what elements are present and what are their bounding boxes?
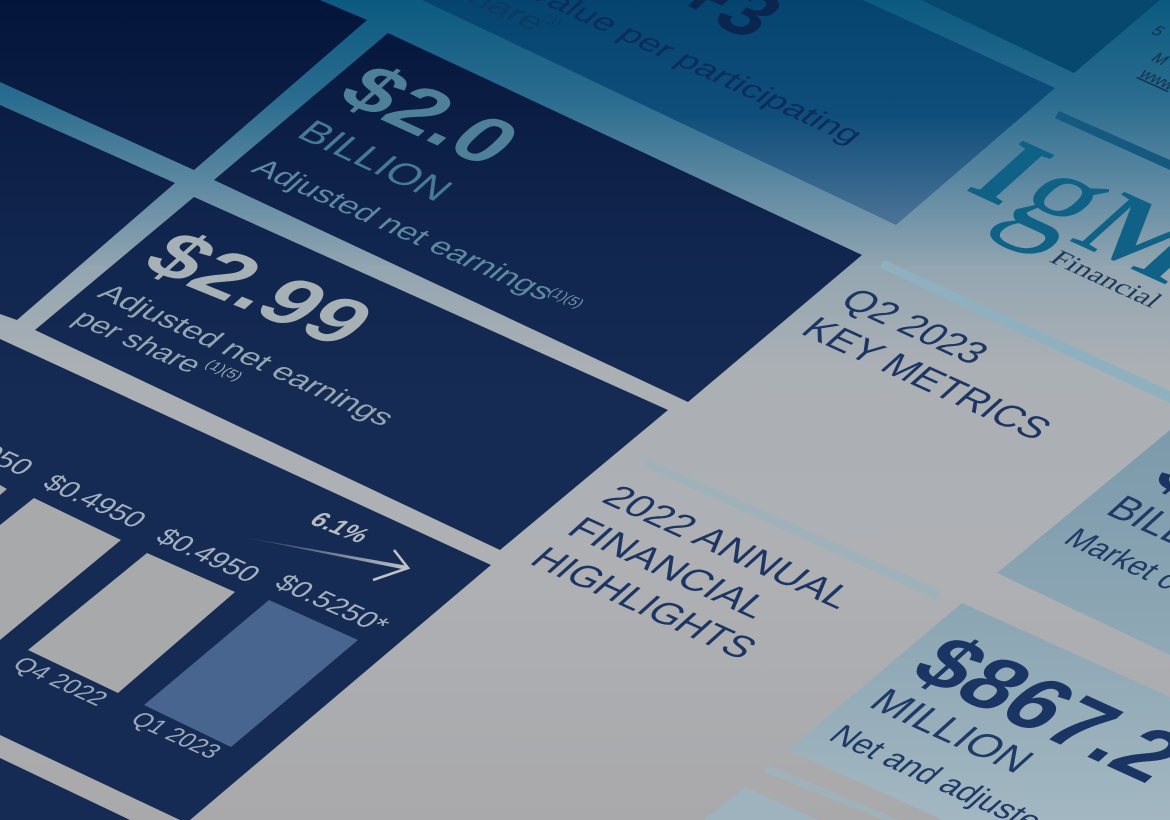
panel: top left blank: [0, 0, 367, 170]
bar: Q3 2022: [0, 498, 121, 640]
value label Q4: $0.4950: [36, 469, 153, 533]
value label Q1 2023: $0.5250*: [268, 569, 397, 638]
panel: adjusted net earnings per share: [35, 197, 668, 550]
bar: Q1 2023: [144, 600, 358, 747]
growth percent: 6.1%: [303, 508, 376, 548]
divider: lower: [764, 765, 900, 820]
heading line one: 2022 ANNUAL: [594, 478, 864, 615]
logo: IGM Financial: [947, 123, 1170, 313]
divider: key metrics: [880, 260, 1170, 403]
metric value: $2.0: [322, 51, 539, 179]
contact text: [1134, 23, 1170, 94]
heading: Q2 2023 key metrics: [793, 281, 1061, 446]
panel: book value per share: [422, 0, 1055, 225]
heading: 2022 annual financial highlights: [522, 478, 864, 666]
heading line one: Q2 2023: [832, 281, 998, 371]
panel: top right: [921, 0, 1160, 73]
panel: adjusted net earnings: [214, 33, 862, 402]
panel: dividend bar chart: [0, 339, 491, 820]
logo letter g: g: [976, 129, 1156, 263]
metric value: $2.99: [125, 218, 393, 360]
address digit: 5: [1147, 23, 1170, 39]
footnote: (1)(5): [544, 286, 587, 311]
metric label second line: per share: [66, 305, 210, 378]
axis label Q4 2022: Q4 2022: [6, 652, 114, 711]
panel: middle left blank: [0, 105, 175, 320]
divider: annual highlights: [643, 459, 941, 600]
heading line two: KEY METRICS: [793, 310, 1061, 446]
metric label: Adjusted net earnings: [91, 279, 402, 431]
logo word: Financial: [1043, 246, 1168, 313]
metric label: Adjusted net earnings: [245, 154, 562, 305]
value label Q4 second: $0.4950: [149, 523, 267, 587]
footnote: (3): [538, 12, 566, 30]
panel: net and adjusted net earnings: [788, 603, 1170, 820]
axis label Q1 2023: Q1 2023: [124, 707, 227, 764]
logo letter I: I: [947, 123, 1075, 222]
heading line three: HIGHLIGHTS: [522, 540, 766, 666]
heading line two: FINANCIAL: [559, 510, 780, 625]
footnote: (1)(5): [201, 358, 246, 384]
arrow: [232, 535, 408, 580]
unit: MILLION: [860, 682, 1043, 780]
unit: BILLION: [289, 113, 462, 208]
dark header bar: [1055, 111, 1170, 170]
bar: Q4 2022: [28, 553, 235, 693]
bar fragment: [0, 485, 7, 495]
panel: bottom metric: [704, 787, 818, 820]
panel: bottom left: [0, 758, 130, 820]
panel: market capitalization: [997, 430, 1170, 655]
